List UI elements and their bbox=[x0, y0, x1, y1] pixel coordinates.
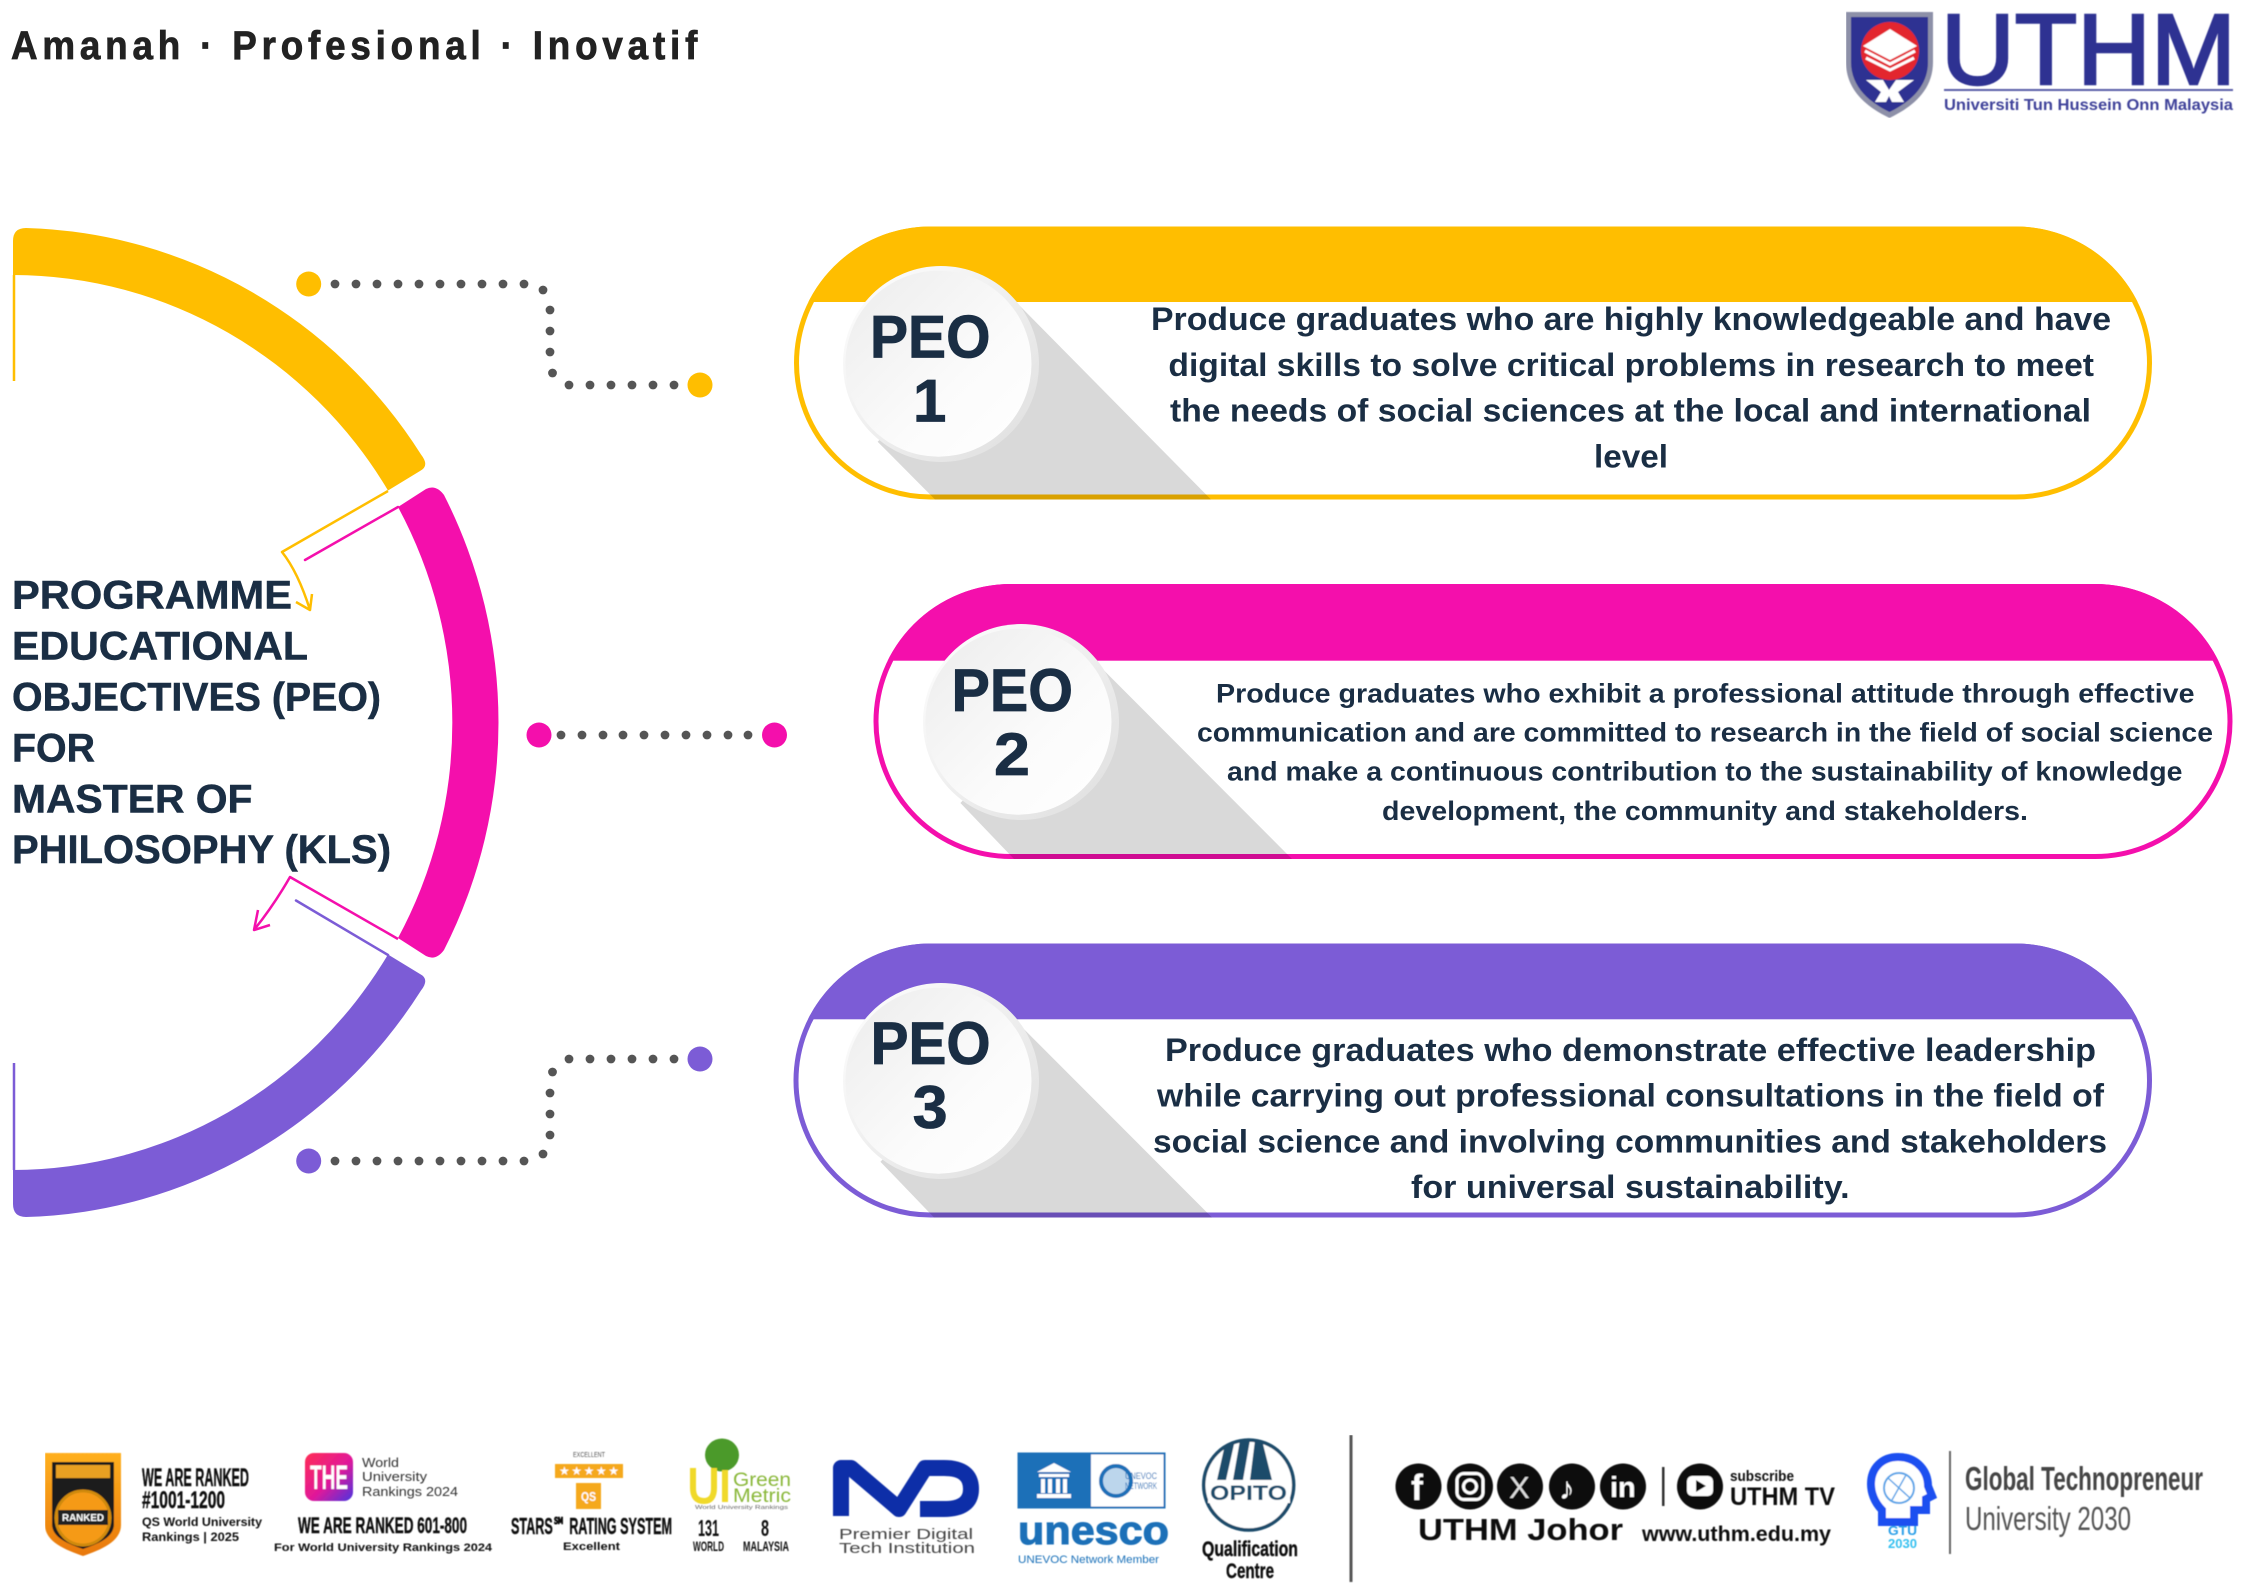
connector: pink dotted bbox=[526, 722, 787, 748]
title: FOR bbox=[12, 726, 95, 770]
title: PROGRAMME bbox=[12, 574, 292, 618]
logo: GTU 2030 bbox=[1871, 1457, 1932, 1551]
panel: PEO 3 bbox=[790, 941, 2156, 1218]
text: THE ranking: For World University Rankings 2024 bbox=[274, 1542, 493, 1554]
text: PEO 2 description bbox=[1197, 679, 2213, 826]
text: PEO 1 description bbox=[1151, 301, 2111, 474]
logo: UNESCO UNEVOC: UNEVOC bbox=[1125, 1471, 1157, 1481]
text: PEO 1 description: the needs of social sciences at the local and international bbox=[1170, 393, 2091, 429]
icons: social media: f bbox=[1411, 1467, 1424, 1508]
logo: UNESCO UNEVOC: unesco bbox=[1018, 1509, 1169, 1553]
text: Global Technopreneur University 2030: University 2030 bbox=[1965, 1500, 2131, 1537]
icons: social media bbox=[1396, 1464, 1723, 1510]
text: THE ranking: WE ARE RANKED 601-800 bbox=[298, 1513, 467, 1538]
logo: UI GreenMetric: 131 bbox=[698, 1515, 719, 1541]
badge: PEO 3: PEO bbox=[871, 1010, 991, 1077]
logo: THE rankings bbox=[305, 1453, 458, 1501]
title bbox=[12, 574, 391, 872]
logo: UNESCO UNEVOC bbox=[1018, 1453, 1169, 1566]
title: PHILOSOPHY (KLS) bbox=[12, 828, 391, 872]
badge: PEO 1 bbox=[843, 266, 1039, 462]
text: PEO 2 description: Produce graduates who exhibit a professional attitude through effective bbox=[1216, 679, 2194, 709]
text: subscribe UTHM TV bbox=[1730, 1468, 1835, 1511]
badge: QS stars rating: Excellent bbox=[563, 1541, 620, 1553]
logo: UI GreenMetric: MALAYSIA bbox=[743, 1538, 789, 1554]
logo: UI GreenMetric: WORLD bbox=[693, 1538, 724, 1554]
title: MASTER OF bbox=[12, 777, 252, 821]
logo: UI GreenMetric: World University Rankings bbox=[695, 1505, 789, 1511]
logo: THE rankings: THE bbox=[310, 1459, 348, 1497]
logo: MD Premier Digital: Tech Institution bbox=[839, 1540, 975, 1557]
text: QS ranking: #1001-1200 bbox=[142, 1487, 225, 1514]
logo: UNESCO UNEVOC: NETWORK bbox=[1125, 1481, 1157, 1491]
logo: UI GreenMetric bbox=[693, 1438, 791, 1554]
logo: MD Premier Digital bbox=[839, 1468, 975, 1557]
text: QS ranking bbox=[142, 1464, 262, 1544]
badge: PEO 1: PEO bbox=[870, 304, 990, 371]
text: PEO 3 description bbox=[1153, 1032, 2107, 1205]
text: PEO 2 description: development, the community and stakeholders. bbox=[1382, 796, 2028, 826]
text: website: www.uthm.edu.my bbox=[1641, 1523, 1831, 1546]
badge: PEO 2: 2 bbox=[994, 721, 1030, 788]
panel: PEO 1 bbox=[790, 224, 2156, 500]
UTHM logo bbox=[1846, 0, 2236, 118]
text: subscribe UTHM TV: UTHM TV bbox=[1730, 1483, 1835, 1511]
logo: THE rankings: World bbox=[362, 1455, 399, 1470]
text: PEO 2 description: communication and are committed to research in the field of social science bbox=[1197, 718, 2213, 748]
logo: UI GreenMetric: 8 bbox=[761, 1515, 769, 1541]
badge: QS ranked bbox=[45, 1453, 121, 1556]
text: PEO 2 description: and make a continuous contribution to the sustainability of knowledge bbox=[1227, 757, 2182, 787]
text: subscribe UTHM TV: subscribe bbox=[1730, 1468, 1794, 1485]
logo: THE rankings: Rankings 2024 bbox=[362, 1484, 458, 1499]
text: PEO 3 description: social science and involving communities and stakeholders bbox=[1153, 1124, 2107, 1160]
text: QS ranking: QS World University bbox=[142, 1515, 262, 1529]
badge: QS ranked: RANKED bbox=[62, 1513, 104, 1524]
logo: UI GreenMetric: Metric bbox=[733, 1486, 791, 1507]
text: PEO 3 description: for universal sustainability. bbox=[1411, 1169, 1850, 1205]
logo: UI GreenMetric: Green bbox=[733, 1470, 791, 1491]
badge: PEO 3 bbox=[843, 983, 1039, 1179]
logo: OPITO: Qualification bbox=[1202, 1538, 1298, 1561]
arc segment: pink bbox=[254, 487, 498, 958]
panel: PEO 2 bbox=[870, 582, 2236, 859]
title: EDUCATIONAL bbox=[12, 624, 308, 668]
badge: QS stars rating bbox=[511, 1452, 672, 1553]
badge: QS stars rating: QS bbox=[581, 1489, 596, 1504]
connector: yellow dotted bbox=[296, 272, 712, 398]
logo: OPITO: OPITO bbox=[1210, 1482, 1287, 1505]
icons: social media: in bbox=[1610, 1472, 1636, 1504]
logo: OPITO bbox=[1202, 1440, 1298, 1583]
icons: social media: X bbox=[1509, 1470, 1530, 1505]
text: THE ranking bbox=[274, 1513, 493, 1554]
text: QS ranking: WE ARE RANKED bbox=[142, 1464, 249, 1492]
university name: Universiti Tun Hussein Onn Malaysia bbox=[1944, 97, 2233, 114]
badge: PEO 2 bbox=[923, 624, 1119, 820]
badge: PEO 3: 3 bbox=[913, 1074, 948, 1141]
text: PEO 1 description: Produce graduates who are highly knowledgeable and have bbox=[1151, 301, 2111, 337]
badge: PEO 1: 1 bbox=[913, 368, 946, 435]
text: PEO 3 description: Produce graduates who demonstrate effective leadership bbox=[1165, 1032, 2096, 1068]
icons: social media: ♪ bbox=[1559, 1471, 1574, 1506]
logo: GTU 2030: 2030 bbox=[1888, 1536, 1917, 1551]
logo: OPITO: Centre bbox=[1226, 1560, 1274, 1583]
badge: QS stars rating: ★★★★★ bbox=[559, 1464, 619, 1478]
icon: UTHM shield bbox=[1846, 12, 1933, 118]
text: UTHM Johor: UTHM Johor bbox=[1418, 1512, 1623, 1547]
connector: purple dotted bbox=[296, 1046, 712, 1174]
text: PEO 1 description: digital skills to solve critical problems in research to meet bbox=[1168, 347, 2094, 383]
title: OBJECTIVES (PEO) bbox=[12, 676, 381, 720]
logo: GTU 2030: GTU bbox=[1888, 1523, 1917, 1538]
text: PEO 3 description: while carrying out professional consultations in the field of bbox=[1156, 1078, 2104, 1114]
badge: PEO 2: PEO bbox=[952, 657, 1073, 724]
badge: QS stars rating: EXCELLENT bbox=[573, 1452, 606, 1459]
arc segment: purple bbox=[13, 900, 425, 1217]
footer: accreditation and social strip bbox=[45, 1435, 2203, 1583]
text: PEO 1 description: level bbox=[1594, 438, 1668, 474]
slogan: Amanah · Profesional · Inovatif bbox=[11, 24, 698, 68]
panel: left arc diagram bbox=[12, 228, 498, 1217]
text: QS ranking: Rankings | 2025 bbox=[142, 1530, 239, 1544]
arc segment: yellow bbox=[13, 228, 425, 610]
logo: THE rankings: University bbox=[362, 1469, 428, 1484]
badge: QS stars rating: STARS℠ RATING SYSTEM bbox=[511, 1513, 672, 1539]
logo: MD Premier Digital: Premier Digital bbox=[839, 1526, 973, 1543]
text: Global Technopreneur University 2030 bbox=[1965, 1460, 2203, 1537]
logo: UNESCO UNEVOC: UNEVOC Network Member bbox=[1018, 1554, 1159, 1566]
